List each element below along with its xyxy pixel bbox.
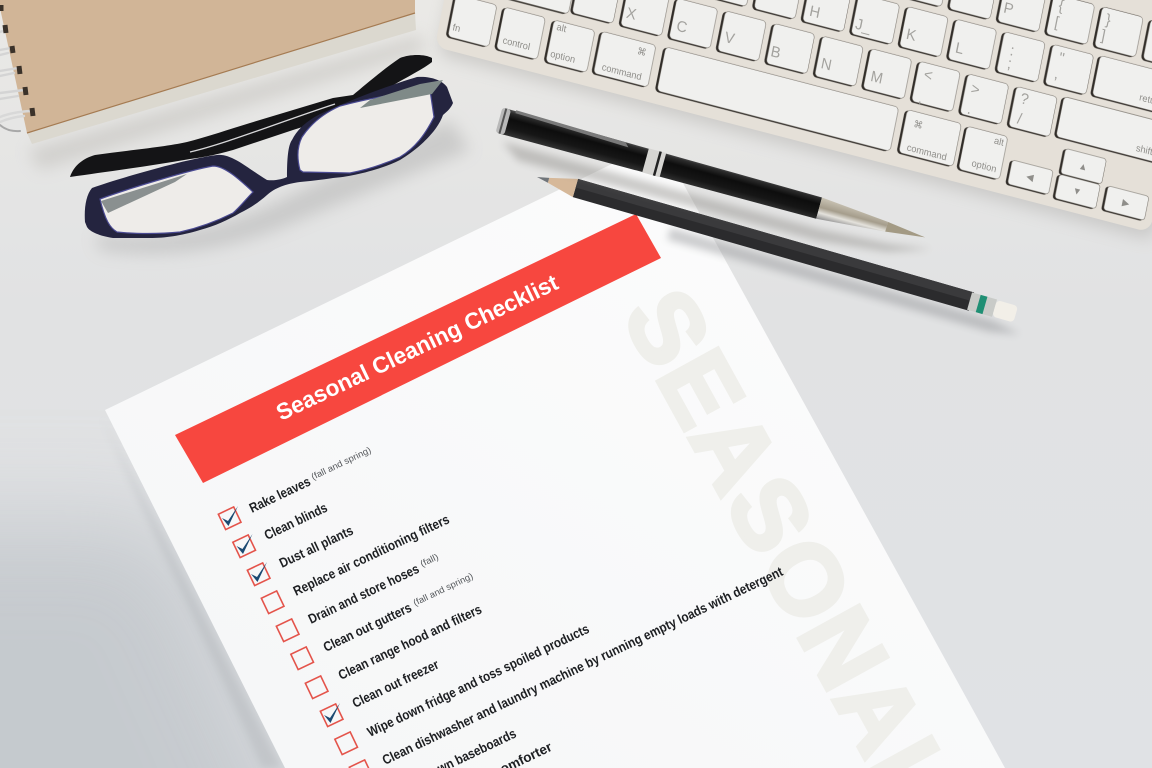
key legends: X — [625, 4, 638, 24]
paper checklist — [100, 163, 1005, 768]
key legends: K — [905, 26, 918, 45]
keyboard — [435, 0, 1152, 240]
keyboard: option — [549, 49, 576, 66]
checklist items: (fall and spring) — [412, 571, 475, 608]
keyboard body — [435, 0, 1152, 232]
checklist items: Replace air conditioning filters — [291, 512, 452, 599]
checklist items: Dust all plants — [277, 523, 355, 571]
keyboard: alt — [556, 22, 568, 35]
notebook — [0, 0, 425, 170]
keyboard keys — [447, 0, 1152, 223]
pencil body — [573, 179, 974, 311]
key legends: , — [917, 90, 924, 108]
pencil ferrule and eraser — [967, 292, 997, 317]
key legends: : — [1008, 42, 1016, 60]
checklist items: Clean out freezer — [350, 656, 442, 711]
key legends: J_ — [854, 15, 873, 37]
glasses — [70, 55, 470, 254]
checklist items: Clean blinds — [262, 500, 330, 543]
checklist items: (fall) — [419, 552, 440, 569]
checklist items: Drain and store hoses — [306, 561, 422, 627]
keyboard: ◀ — [1025, 171, 1035, 184]
checkboxes — [218, 507, 372, 768]
glasses temple arm — [70, 55, 432, 177]
pen — [496, 107, 931, 273]
key legends: < — [922, 66, 934, 85]
key legends: B — [769, 43, 782, 62]
keyboard: fn — [451, 22, 461, 35]
keyboard: command — [601, 62, 643, 83]
key legends — [584, 0, 1113, 150]
pen clip — [515, 110, 630, 147]
keyboard: ▼ — [1071, 185, 1083, 199]
keyboard: ▶ — [1121, 197, 1131, 210]
keyboard: ▲ — [1077, 160, 1088, 174]
keyboard: command — [906, 142, 948, 164]
key legends: , — [1053, 65, 1060, 83]
key legends: ? — [1019, 90, 1030, 109]
right lens — [298, 90, 434, 173]
pencil wood tip — [546, 171, 578, 197]
key legends: ] — [1100, 27, 1107, 45]
keyboard: option — [971, 158, 997, 175]
checklist items: Wipe down fridge and toss spoiled products — [365, 621, 592, 740]
key legends: N — [819, 55, 833, 75]
checklist items: Clean out gutters — [321, 600, 414, 655]
pen metal nose — [816, 198, 889, 237]
key legends: > — [969, 80, 981, 99]
notebook spiral binding — [0, 5, 33, 131]
red title banner — [175, 214, 661, 483]
notebook pages — [27, 13, 416, 144]
pen body — [499, 109, 823, 221]
checklist items: (fall and spring) — [310, 445, 373, 482]
key legends: ; — [1006, 55, 1013, 73]
key legends: M — [869, 68, 884, 88]
paper sheet — [105, 163, 1005, 768]
keyboard: ⌘ — [636, 46, 647, 59]
notebook cover — [0, 0, 415, 133]
check marks — [222, 506, 340, 723]
key legends: V — [723, 29, 736, 48]
checklist items: Clean range hood and filters — [336, 602, 484, 683]
pencil — [534, 168, 1021, 340]
key legends: / — [1016, 110, 1024, 128]
checklist title: Seasonal Cleaning Checklist — [272, 269, 562, 426]
keyboard: ⌘ — [913, 119, 924, 132]
key legends: . — [966, 100, 973, 118]
key legends: C — [675, 17, 689, 37]
checklist items: Rake leaves — [247, 474, 313, 516]
pen end cap — [496, 107, 511, 135]
left lens — [100, 166, 253, 234]
key legends: H — [808, 2, 822, 22]
key legends: } — [1104, 11, 1112, 29]
key legends: L — [954, 39, 965, 58]
checklist items — [247, 445, 786, 768]
keyboard: control — [502, 35, 531, 53]
keyboard: alt — [993, 135, 1005, 149]
key legends: " — [1057, 49, 1066, 68]
glasses frame — [85, 77, 453, 238]
checklist items: Clean dishwasher and laundry machine by running empty loads with detergent — [380, 564, 786, 768]
key legends: [ — [1053, 14, 1061, 32]
pen band — [642, 148, 666, 177]
